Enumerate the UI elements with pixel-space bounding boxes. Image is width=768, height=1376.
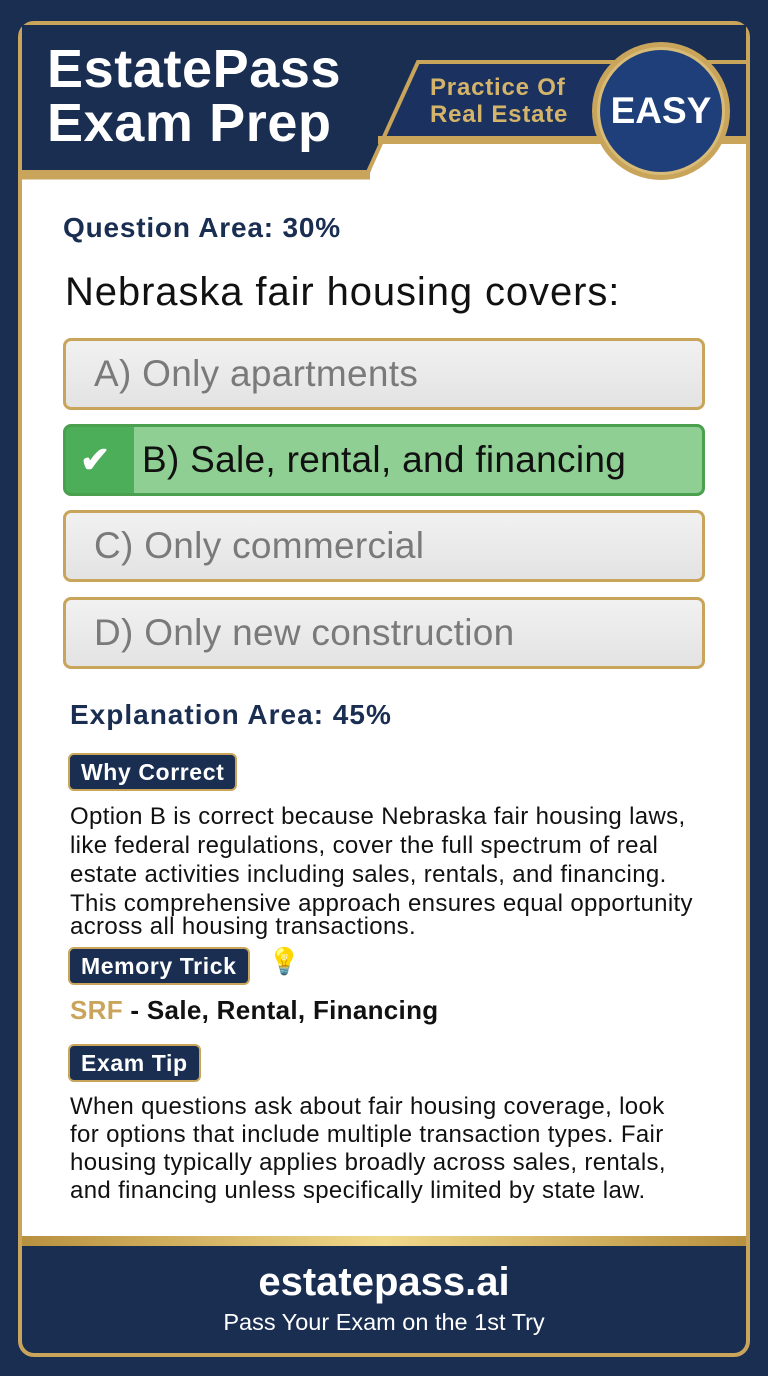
option B correct: B) Sale, rental, and financing xyxy=(142,439,626,480)
title xyxy=(47,39,341,153)
question area label: Question Area: 30% xyxy=(63,212,341,243)
title: Exam Prep xyxy=(47,93,332,153)
tag: exam tip xyxy=(68,1044,201,1082)
why correct text: Option B is correct because Nebraska fair housing laws, xyxy=(70,803,686,830)
exam tip text: housing typically applies broadly across sales, rentals, xyxy=(70,1149,666,1176)
explanation label: Explanation Area: 45% xyxy=(70,699,392,730)
why correct text xyxy=(70,803,693,940)
icon: check: ✔ xyxy=(80,439,110,480)
tag: memory trick xyxy=(68,947,250,985)
option C: C) Only commercial xyxy=(94,525,424,566)
subtitle: Practice Of Real Estate: Practice Of xyxy=(430,74,566,101)
question: Nebraska fair housing covers: xyxy=(65,270,620,314)
tag: why correct: Why Correct xyxy=(81,759,224,785)
subtitle: Practice Of Real Estate: Real Estate xyxy=(430,101,568,128)
option A xyxy=(63,338,705,410)
option A: A) Only apartments xyxy=(94,353,418,394)
subtitle: Practice Of Real Estate xyxy=(430,74,568,128)
footer brand: estatepass.ai xyxy=(258,1260,510,1304)
tag: why correct xyxy=(68,753,237,791)
option C xyxy=(63,510,705,582)
exam tip text: When questions ask about fair housing coverage, look xyxy=(70,1093,665,1120)
title: EstatePass xyxy=(47,39,341,99)
tag: memory trick: Memory Trick xyxy=(81,953,236,979)
header graphic xyxy=(22,25,746,180)
footer tagline: Pass Your Exam on the 1st Try xyxy=(223,1309,545,1335)
exam tip text xyxy=(70,1093,666,1204)
option D: D) Only new construction xyxy=(94,612,515,653)
exam tip text: and financing unless specifically limited by state law. xyxy=(70,1177,646,1204)
icon: lightbulb: 💡 xyxy=(268,946,300,976)
why correct text: like federal regulations, cover the full spectrum of real xyxy=(70,832,658,859)
option D xyxy=(63,597,705,669)
why correct text: estate activities including sales, rentals, and financing. xyxy=(70,861,667,888)
why correct text: This comprehensive approach ensures equal opportunity xyxy=(70,890,693,917)
gold band xyxy=(22,1236,746,1246)
badge: EASY: EASY xyxy=(611,90,711,131)
option B correct xyxy=(63,424,705,496)
tag: exam tip: Exam Tip xyxy=(81,1050,188,1076)
why correct text: across all housing transactions. xyxy=(70,913,416,940)
memory trick text: SRF - Sale, Rental, Financing xyxy=(70,995,438,1025)
white body xyxy=(22,178,746,1238)
exam tip text: for options that include multiple transaction types. Fair xyxy=(70,1121,664,1148)
badge: EASY xyxy=(592,42,730,180)
